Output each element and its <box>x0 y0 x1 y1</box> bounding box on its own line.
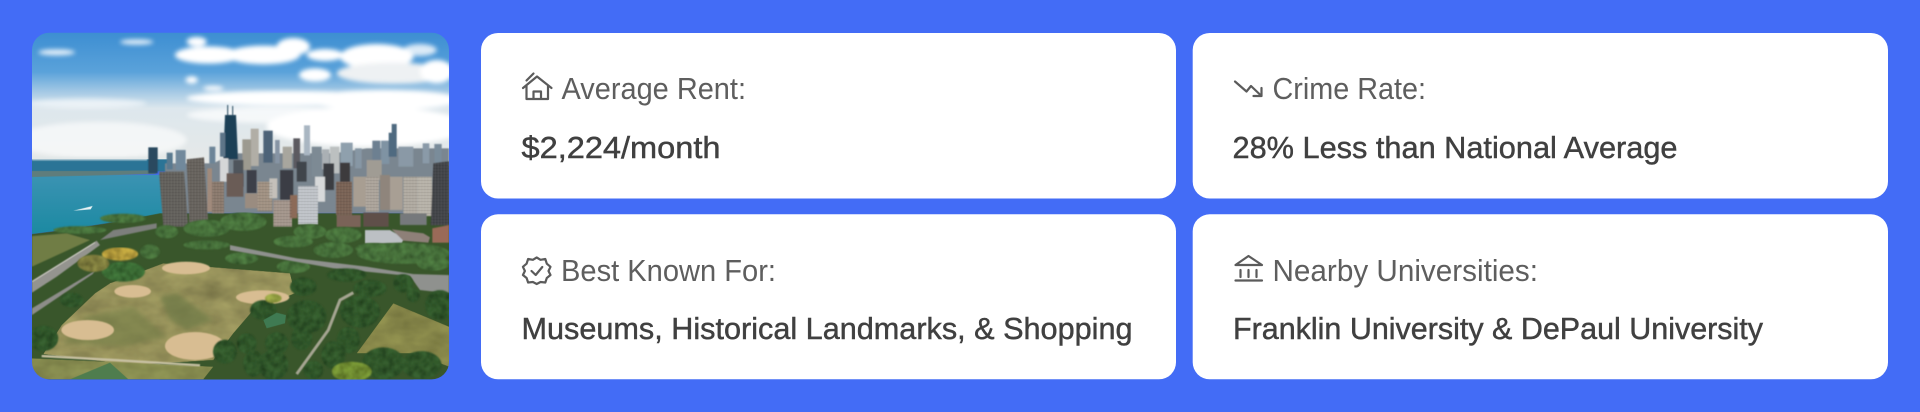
icon: trending down arrow <box>1235 82 1262 96</box>
panel: average rent <box>481 33 1176 198</box>
lawn <box>32 263 449 379</box>
field house <box>263 313 286 328</box>
label: crime rate: Crime Rate: <box>1272 71 1426 106</box>
lake <box>32 159 172 171</box>
label: average rent: Average Rent: <box>562 71 746 106</box>
value: nearby universities: Franklin University & DePaul University <box>1233 311 1763 346</box>
distant skyline <box>148 105 449 213</box>
foreground trees <box>28 247 455 382</box>
horizon haze <box>32 159 148 162</box>
tree mass <box>53 212 450 273</box>
value: rent: $2,224/month <box>522 130 720 165</box>
sky <box>32 33 449 166</box>
icon: house <box>523 74 552 99</box>
clouds <box>13 37 467 158</box>
value: crime rate: 28% Less than National Average <box>1232 130 1678 165</box>
label: nearby universities: Nearby Universities: <box>1272 253 1538 288</box>
panel: crime rate <box>1193 33 1888 198</box>
paths <box>42 356 200 365</box>
photo: city skyline and park <box>13 33 467 382</box>
panel: best known for <box>481 214 1176 379</box>
panel: nearby universities <box>1193 214 1888 379</box>
walking path <box>297 293 353 374</box>
baseball diamonds <box>61 262 289 360</box>
label: best known for: Best Known For: <box>561 253 776 288</box>
ground <box>32 213 449 380</box>
icon: verified badge <box>523 258 550 284</box>
highway and roads <box>32 223 449 315</box>
value: best known for: Museums, Historical Landmarks, & Shopping <box>522 311 1132 346</box>
icon: university building <box>1236 256 1262 280</box>
foreground towers <box>159 157 449 243</box>
